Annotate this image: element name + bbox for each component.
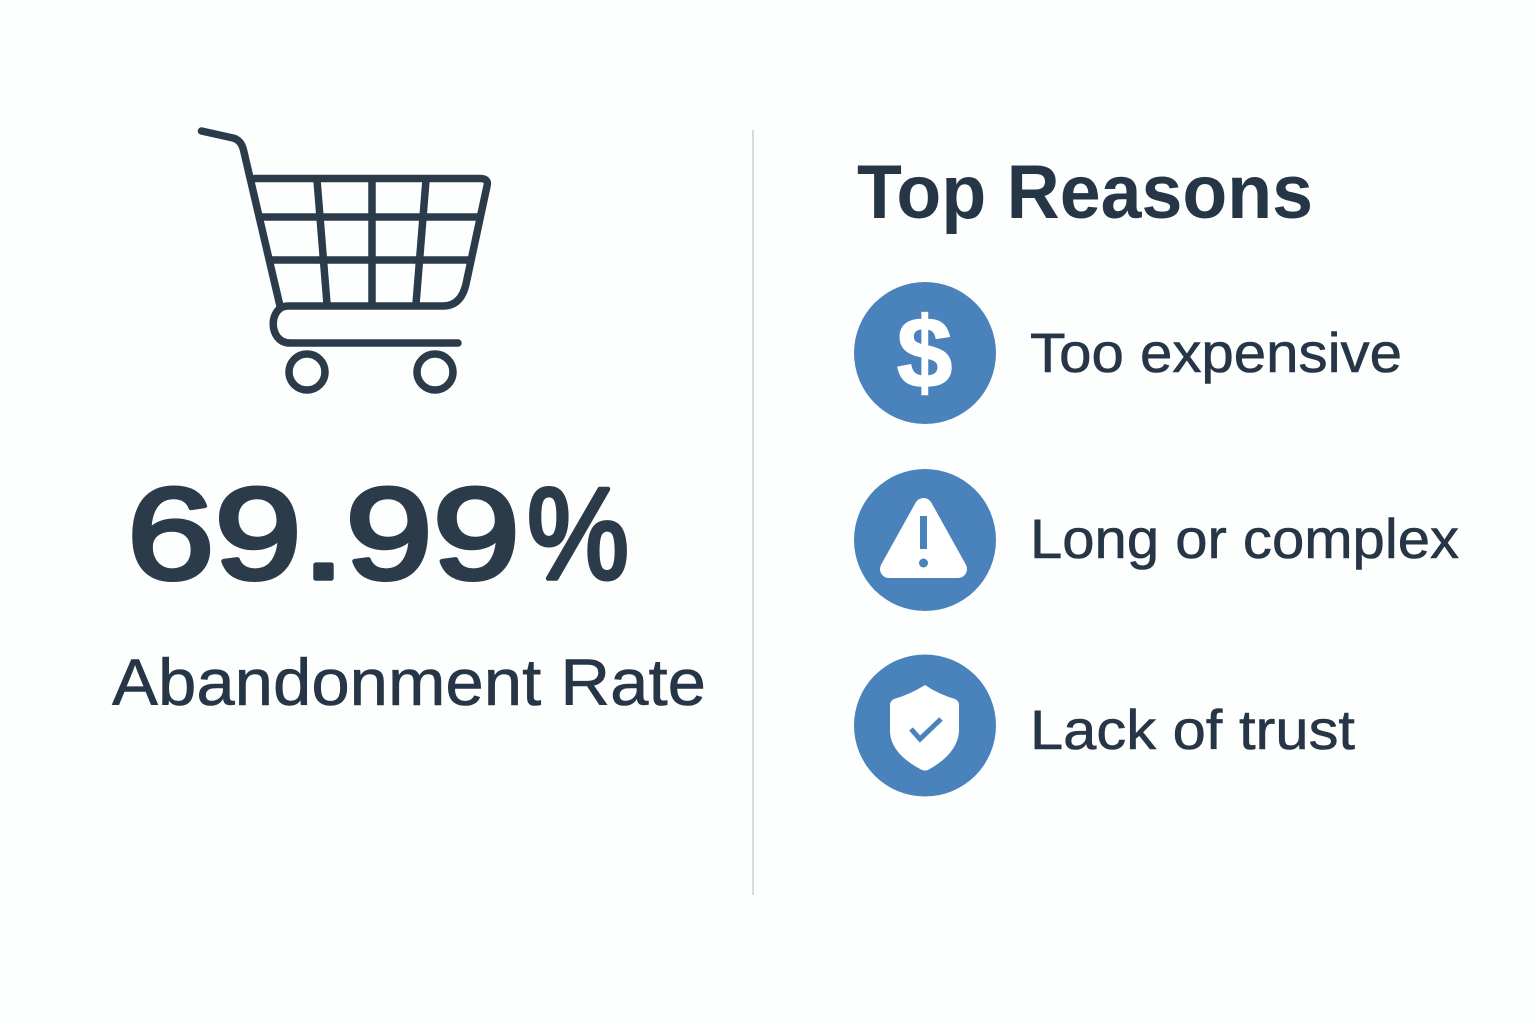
big statistic [127, 460, 629, 606]
panel: abandonment statistic [112, 131, 706, 719]
reason: lack of trust [854, 654, 1355, 796]
icon: shield check [854, 654, 996, 796]
label: lack of trust: Lack of trust [1030, 698, 1355, 761]
label: long or complex: Long or complex [1030, 507, 1459, 570]
label: too expensive: Too expensive [1030, 321, 1402, 384]
panel: top reasons [854, 150, 1459, 796]
reason: long or complex [854, 469, 1459, 611]
icon: warning triangle [854, 469, 996, 611]
icon: dollar: $ [897, 297, 952, 409]
icon: dollar [854, 282, 996, 424]
big statistic: 69.99 [127, 460, 520, 606]
big statistic: % [527, 460, 629, 606]
reason: too expensive [854, 282, 1402, 424]
icon: shopping cart [202, 131, 487, 390]
statistic label: Abandonment Rate [112, 645, 706, 719]
heading: Top Reasons [857, 150, 1313, 235]
